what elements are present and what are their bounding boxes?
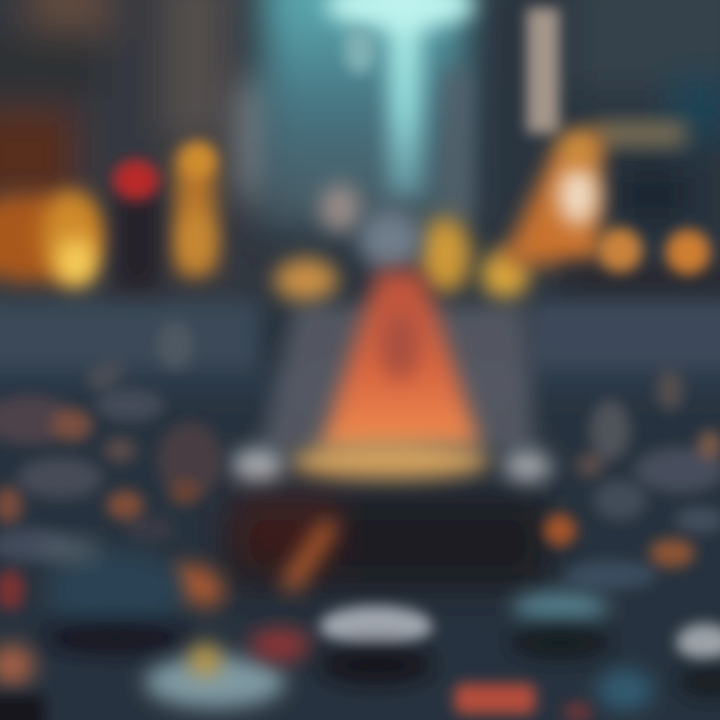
central dark base <box>225 495 550 590</box>
crowd: right group <box>564 370 720 589</box>
vehicle: front right bowl <box>508 592 612 660</box>
vehicle: left dark car <box>40 538 185 654</box>
sky glow: central light shaft <box>262 0 475 230</box>
central glass cone <box>232 270 551 485</box>
lights: left warm glow <box>0 142 216 286</box>
bottom red and teal accents <box>455 670 653 720</box>
buildings: right block <box>470 0 720 300</box>
base orange accents <box>165 514 576 615</box>
tower highlights <box>527 8 685 146</box>
icon: traffic light <box>113 160 160 290</box>
vehicle: front centre bowl <box>318 606 434 685</box>
vehicle: front left <box>0 629 310 720</box>
lights: centre street glows <box>274 184 529 302</box>
vehicle: far right bowl <box>677 624 720 698</box>
lights: right vehicle glow <box>500 130 720 292</box>
road band <box>0 300 720 400</box>
crowd: left group <box>0 321 222 610</box>
buildings: left block <box>0 0 275 310</box>
